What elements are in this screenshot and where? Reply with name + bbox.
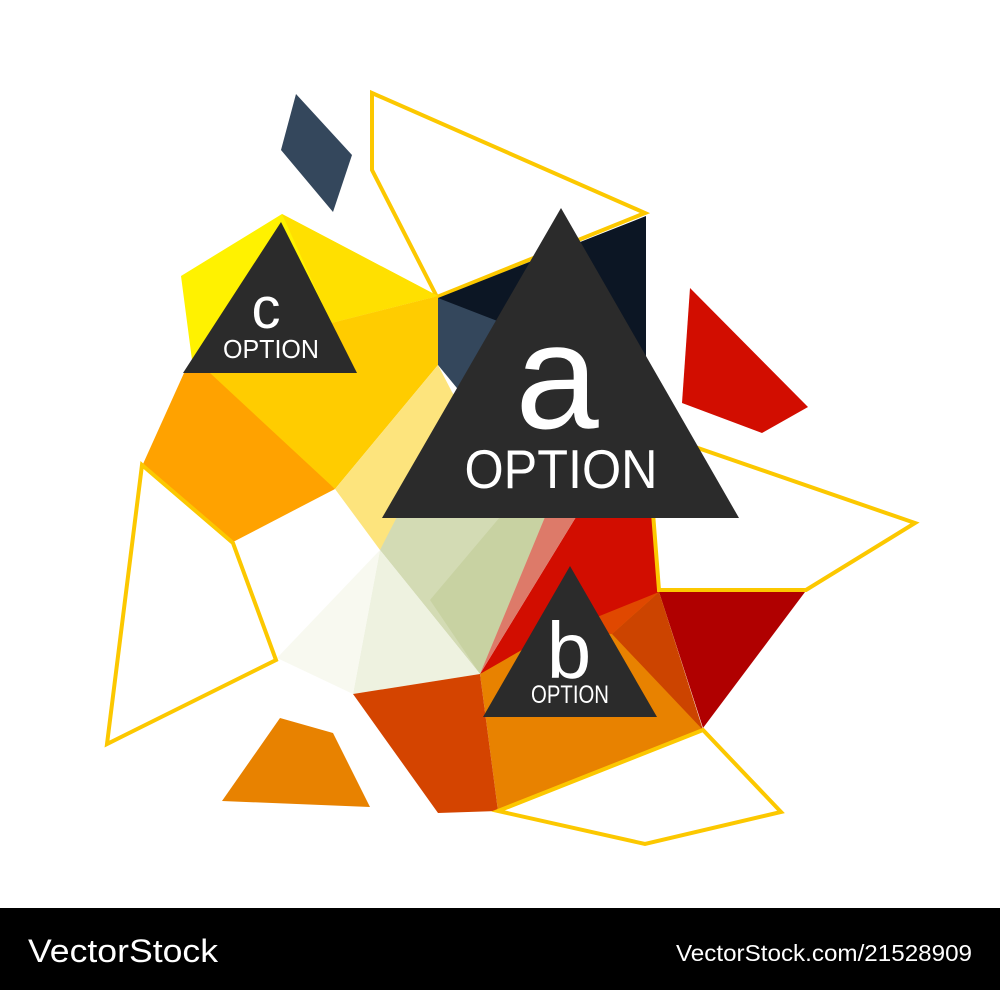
footer bar [0, 908, 1000, 990]
outline: right [640, 428, 915, 590]
triangle b: option b: OPTION [531, 681, 609, 709]
footer bar: VectorStock.com/21528909 [676, 940, 972, 966]
shape: navy diamond [281, 94, 352, 212]
triangle a: option a: a [515, 292, 599, 460]
outline: bottom [498, 730, 781, 844]
triangle b: option b [483, 566, 657, 717]
triangle a: option a [382, 208, 739, 518]
outline: top triangle [372, 93, 645, 297]
mosaic: polygon cluster [143, 214, 805, 813]
triangle c: option c: OPTION [223, 334, 319, 364]
shape: bottom orange quad [222, 718, 370, 807]
shape: red right quad [682, 288, 808, 433]
outline: left [107, 465, 276, 744]
triangle c: option c [183, 222, 357, 373]
triangle c: option c: c [252, 276, 280, 341]
triangle b: option b: b [547, 606, 591, 695]
triangle a: option a: OPTION [464, 438, 658, 500]
footer bar: VectorStock [28, 933, 219, 969]
